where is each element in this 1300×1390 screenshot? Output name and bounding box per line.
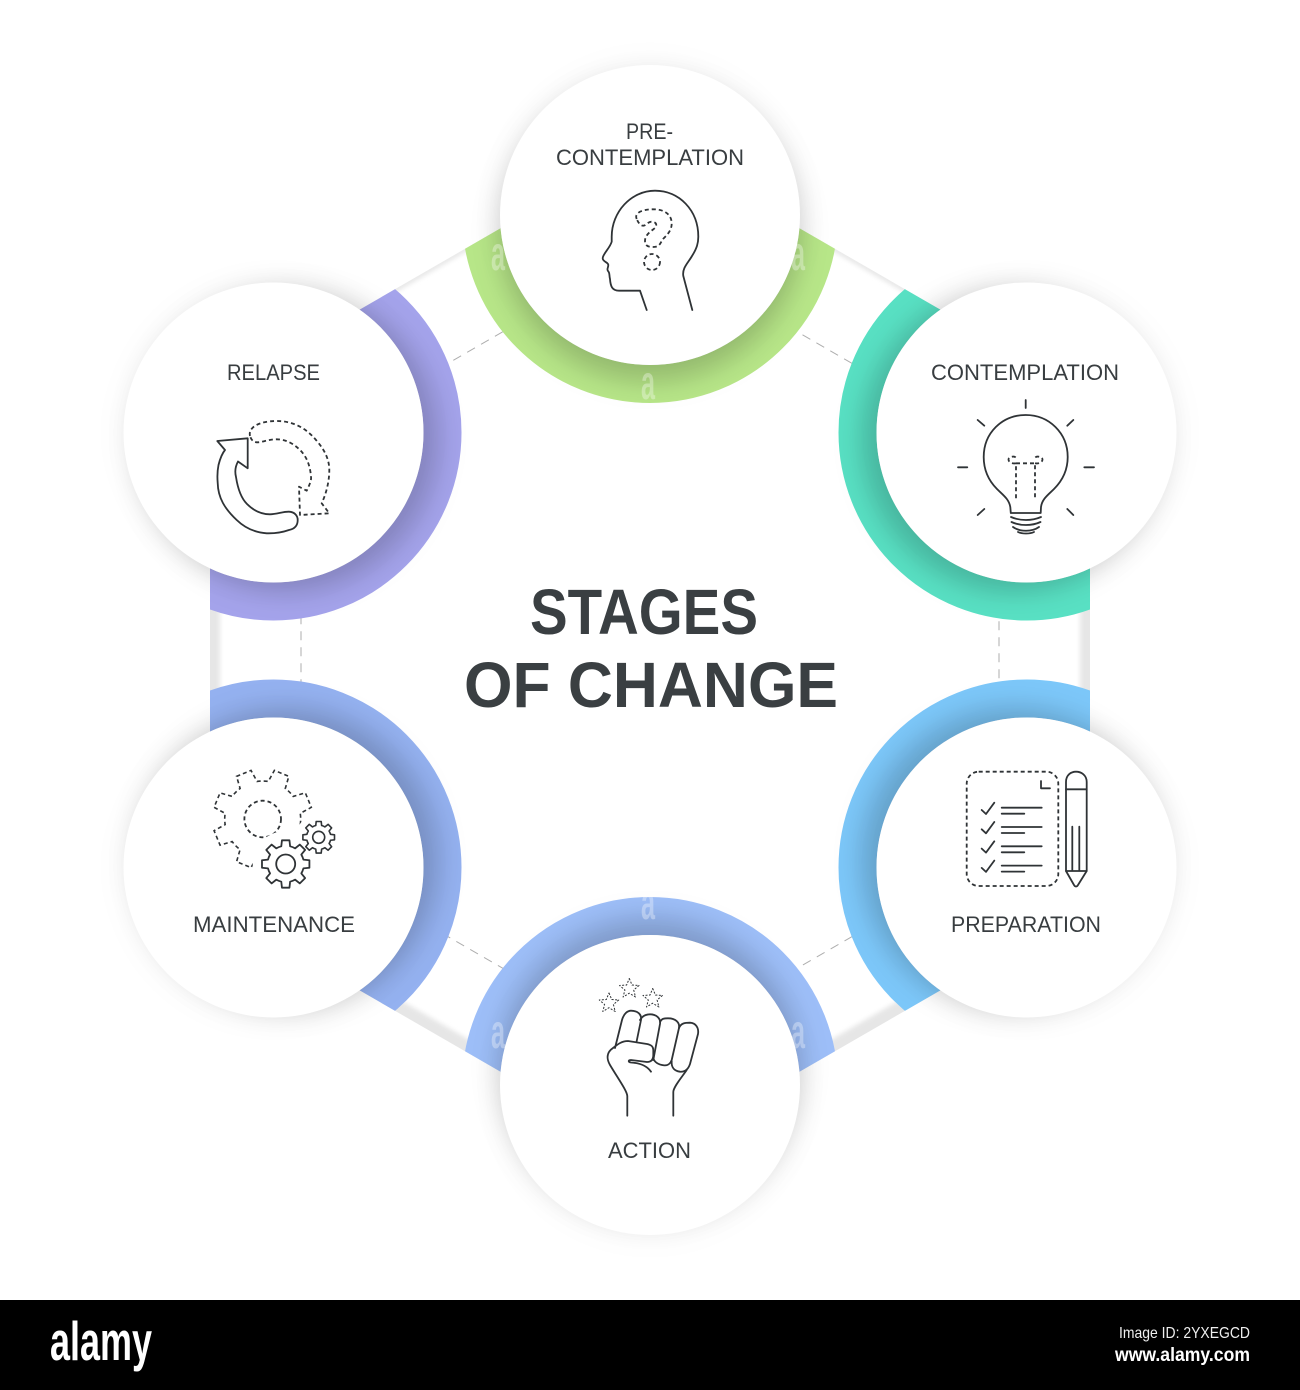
stage: maintenance: [104, 698, 442, 1036]
circle: contemplation: [876, 282, 1176, 582]
icon: raised fist with stars: [599, 978, 698, 1116]
label: relapse: RELAPSE: [227, 360, 320, 385]
halo: contemplation: [874, 280, 1180, 586]
hexagon outline band: [210, 249, 1090, 1051]
stage: contemplation: [858, 264, 1196, 602]
icon: checklist and pencil: [967, 772, 1087, 886]
ring: contemplation: [838, 289, 1090, 620]
ring: action: [465, 897, 835, 1072]
label: maintenance: MAINTENANCE: [193, 912, 355, 937]
watermark letters: a: [791, 228, 805, 281]
circle: maintenance: [124, 718, 424, 1018]
circle: pre-contemplation: [500, 65, 800, 365]
label: contemplation: CONTEMPLATION: [931, 360, 1119, 385]
stage: action: [481, 916, 819, 1254]
halo: pre-contemplation: [497, 62, 803, 368]
halo: preparation: [874, 714, 1180, 1020]
inner dashed hexagon: [301, 247, 999, 1053]
shadow: action: [498, 917, 802, 1221]
shadow: maintenance: [135, 708, 439, 1012]
circle: preparation: [876, 718, 1176, 1018]
stage: preparation: [858, 698, 1196, 1036]
shadow: preparation: [861, 708, 1165, 1012]
title: OF CHANGE: [464, 649, 838, 721]
ring: maintenance: [210, 680, 462, 1011]
ring: relapse: [210, 289, 462, 620]
halo: maintenance: [120, 714, 426, 1020]
shadow: pre-contemplation: [498, 79, 802, 383]
stage: pre-contemplation: [481, 46, 819, 384]
shadow: contemplation: [861, 288, 1165, 592]
icon: gears: [198, 754, 342, 897]
label: preparation: PREPARATION: [951, 912, 1101, 937]
label: pre-contemplation: PRE-: [626, 119, 673, 144]
watermark letters: a: [791, 1006, 805, 1059]
title: STAGES: [530, 576, 758, 648]
watermark letters: a: [491, 1006, 505, 1059]
watermark letters: a: [641, 357, 655, 410]
circle: relapse: [124, 282, 424, 582]
label: pre-contemplation: CONTEMPLATION: [556, 145, 744, 170]
footer logo: alamy: [50, 1310, 152, 1372]
watermark letters: [491, 228, 805, 1059]
footer url: www.alamy.com: [1114, 1345, 1250, 1366]
stage: relapse: [104, 264, 442, 602]
icon: cycle arrows: [217, 421, 329, 533]
ring: preparation: [838, 680, 1090, 1011]
watermark letters: a: [641, 877, 655, 930]
footer bar: [0, 1300, 1300, 1390]
halo: relapse: [120, 280, 426, 586]
icon: head with question mark: [603, 191, 698, 310]
label: action: ACTION: [608, 1138, 691, 1163]
title: [464, 576, 838, 721]
watermark letters: a: [491, 228, 505, 281]
icon: light bulb: [958, 400, 1094, 534]
ring: pre-contemplation: [465, 228, 835, 403]
shadow: relapse: [135, 288, 439, 592]
halo: action: [497, 932, 803, 1238]
footer image id: Image ID: 2YXEGCD: [1119, 1325, 1250, 1342]
circle: action: [500, 935, 800, 1235]
